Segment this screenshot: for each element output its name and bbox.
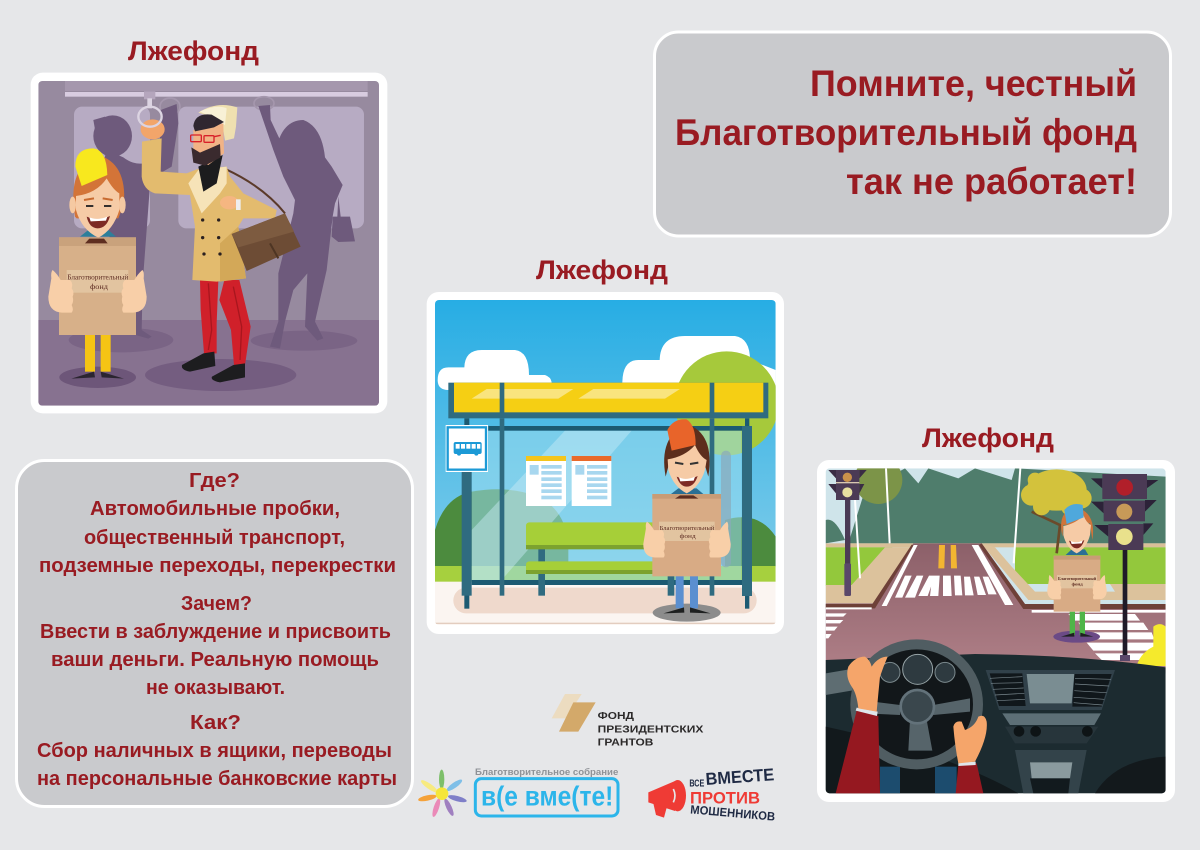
instrument cluster <box>859 648 974 760</box>
dashboard <box>826 654 1166 793</box>
illustration: passenger with donation box in the bus <box>31 73 387 413</box>
collar <box>80 230 116 237</box>
logo: together against fraudsters: ВМЕСТЕ <box>705 764 775 789</box>
fake collector with box <box>1047 504 1107 643</box>
logos <box>418 694 776 824</box>
logo: presidential grants fund <box>552 694 704 749</box>
block: where <box>39 469 396 577</box>
hands <box>48 270 73 313</box>
strap <box>226 169 285 213</box>
logo: all together charity assembly: Благотворительное собрание <box>475 767 618 777</box>
block: where: общественный транспорт, <box>84 526 345 549</box>
center console <box>986 670 1115 710</box>
illustration: fake collector at a bus stop <box>427 292 784 634</box>
fake collector with box: фонд <box>90 282 108 291</box>
glasses <box>191 135 221 142</box>
bag <box>232 213 301 271</box>
silhouette: woman <box>258 105 355 348</box>
logo: together against fraudsters: ВСЕ <box>689 779 705 790</box>
large traffic light <box>1091 474 1158 661</box>
heading: Лжефонд center: Лжефонд <box>536 255 668 285</box>
panel: where, why, how <box>16 460 412 806</box>
block: how: Сбор наличных в ящики, переводы <box>37 739 392 762</box>
box label <box>1057 575 1097 588</box>
panel: title message <box>654 32 1170 236</box>
hand on rail <box>141 119 165 139</box>
beanie <box>198 105 237 141</box>
card frame <box>817 460 1175 802</box>
block: why: не оказывают. <box>146 676 285 699</box>
logo: all together charity assembly: в(е вме(те! <box>481 781 613 812</box>
fake collector with box <box>643 419 731 622</box>
coat <box>142 138 277 282</box>
street poles <box>855 468 1020 578</box>
small traffic light <box>828 470 867 596</box>
hand on strap <box>220 196 239 209</box>
hipster passenger <box>138 98 301 382</box>
card frame <box>31 73 387 413</box>
legs <box>85 333 95 372</box>
logo: presidential grants fund: ФОНД <box>598 711 634 722</box>
logo: all together charity assembly <box>475 767 618 816</box>
yellow tree <box>1032 512 1060 553</box>
block: where: подземные переходы, перекрестки <box>39 554 396 577</box>
title text: так не работает! <box>846 161 1137 202</box>
block: why: Ввести в заблуждение и присвоить <box>40 620 391 643</box>
title text <box>675 63 1137 202</box>
fake collector with box: Благотворительный <box>1058 576 1096 581</box>
box label <box>659 522 715 541</box>
title text: Благотворительный фонд <box>675 112 1137 153</box>
shoes <box>182 352 215 372</box>
silhouette: man <box>93 104 178 339</box>
bench <box>526 522 674 596</box>
block: how: Как? <box>190 711 241 734</box>
timetables <box>526 456 611 506</box>
hair and ears <box>73 155 124 218</box>
block: where: Автомобильные пробки, <box>90 497 340 520</box>
logo: together against fraudsters <box>648 764 776 824</box>
logo: together against fraudsters: ПРОТИВ <box>690 788 760 807</box>
logo: flower <box>418 770 467 818</box>
illustration: driver's view of collector at crossroads <box>817 456 1175 802</box>
block: how <box>37 711 397 790</box>
heading: Лжефонд left: Лжефонд <box>128 36 259 66</box>
bus shelter <box>448 383 768 609</box>
logo: presidential grants fund: ГРАНТОВ <box>598 738 653 749</box>
fake collector with box <box>48 148 147 379</box>
head <box>193 123 224 165</box>
title text: Помните, честный <box>810 63 1137 104</box>
driver's arms and hands <box>836 657 987 793</box>
fake collector with box: фонд <box>1072 581 1084 586</box>
logo: together against fraudsters: МОШЕННИКОВ <box>690 802 776 824</box>
trousers <box>200 280 218 353</box>
block: how: на персональные банковские карты <box>37 767 397 790</box>
fake collector with box: Благотворительный <box>67 273 128 282</box>
bus stop sign <box>446 425 488 472</box>
block: why: ваши деньги. Реальную помощь <box>51 648 379 671</box>
cap <box>75 148 107 186</box>
block: where: Где? <box>189 469 240 492</box>
lane marks <box>938 545 957 568</box>
block: why <box>40 592 391 699</box>
fake collector with box: фонд <box>680 533 696 540</box>
steering wheel <box>855 644 978 764</box>
heading: Лжефонд right: Лжефонд <box>922 423 1054 453</box>
face <box>76 178 119 238</box>
card frame <box>427 292 784 634</box>
logo: presidential grants fund: ПРЕЗИДЕНТСКИХ <box>598 724 704 735</box>
driver's lap <box>880 767 900 793</box>
box label <box>67 270 128 293</box>
roof <box>448 383 768 418</box>
fake collector with box: Благотворительный <box>660 525 715 532</box>
block: why: Зачем? <box>181 592 252 615</box>
buttons <box>201 218 222 256</box>
box <box>59 237 136 335</box>
